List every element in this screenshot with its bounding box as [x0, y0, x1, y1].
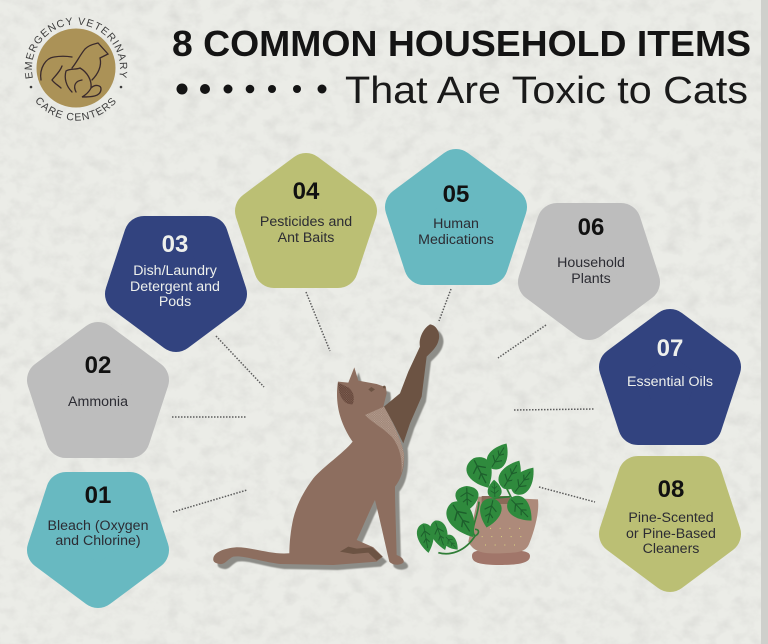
panel 01: bleach: and Chlorine): [55, 533, 141, 549]
logo: Emergency Veterinary Care Centers: [24, 17, 128, 121]
panel 05: medications: 05: [443, 181, 469, 208]
illustration: cat reaching up: [213, 324, 443, 570]
plant pot: [468, 496, 538, 565]
panel 07: essential oils: Essential Oils: [627, 374, 713, 390]
decorative dot row: [176, 84, 326, 94]
panel 02: ammonia: [47, 342, 149, 438]
panel 07: essential oils: 07: [657, 335, 683, 362]
logo: Emergency Veterinary Care Centers: EMERGENCY VETERINARY: [24, 17, 128, 79]
title: That Are Toxic to Cats: [345, 70, 748, 112]
panel 08: pine cleaners: Pine-Scented: [628, 510, 714, 526]
panel 02: ammonia: Ammonia: [68, 394, 128, 410]
panel 04: pesticides: Ant Baits: [278, 230, 334, 246]
panel 08: pine cleaners: [619, 476, 721, 572]
panel 08: pine cleaners: or Pine-Based: [626, 526, 716, 542]
panel 04: pesticides: 04: [293, 178, 320, 205]
panel 06: plants: [538, 214, 640, 320]
title: 8 COMMON HOUSEHOLD ITEMS: [172, 23, 751, 64]
panel 04: pesticides: [255, 173, 357, 268]
panel 01: bleach: 01: [85, 482, 111, 509]
panel 03: detergent: Pods: [159, 294, 191, 310]
panel 05: medications: [405, 169, 507, 265]
panel 02: ammonia: 02: [85, 352, 111, 379]
panel 01: bleach: Bleach (Oxygen: [48, 518, 148, 534]
panel 08: pine cleaners: Cleaners: [643, 541, 699, 557]
illustration: potted plant: [415, 438, 541, 565]
logo: Emergency Veterinary Care Centers: CARE CENTERS: [36, 98, 116, 121]
panel 03: detergent: 03: [162, 231, 188, 258]
connector lines: [172, 289, 595, 512]
title: [172, 23, 751, 112]
panel 06: plants: 06: [578, 214, 604, 241]
panel 03: detergent: Dish/Laundry: [133, 263, 218, 279]
panel 05: medications: Human: [433, 216, 479, 232]
panel 06: plants: Plants: [571, 271, 611, 287]
panel 07: essential oils: [619, 329, 721, 425]
panel 04: pesticides: Pesticides and: [260, 214, 352, 230]
panel 06: plants: Household: [557, 255, 625, 271]
panel 08: pine cleaners: 08: [658, 476, 684, 503]
panel 03: detergent: [125, 231, 227, 332]
panel 03: detergent: Detergent and: [130, 279, 220, 295]
panel 01: bleach: [47, 482, 149, 588]
panel 05: medications: Medications: [418, 232, 494, 248]
